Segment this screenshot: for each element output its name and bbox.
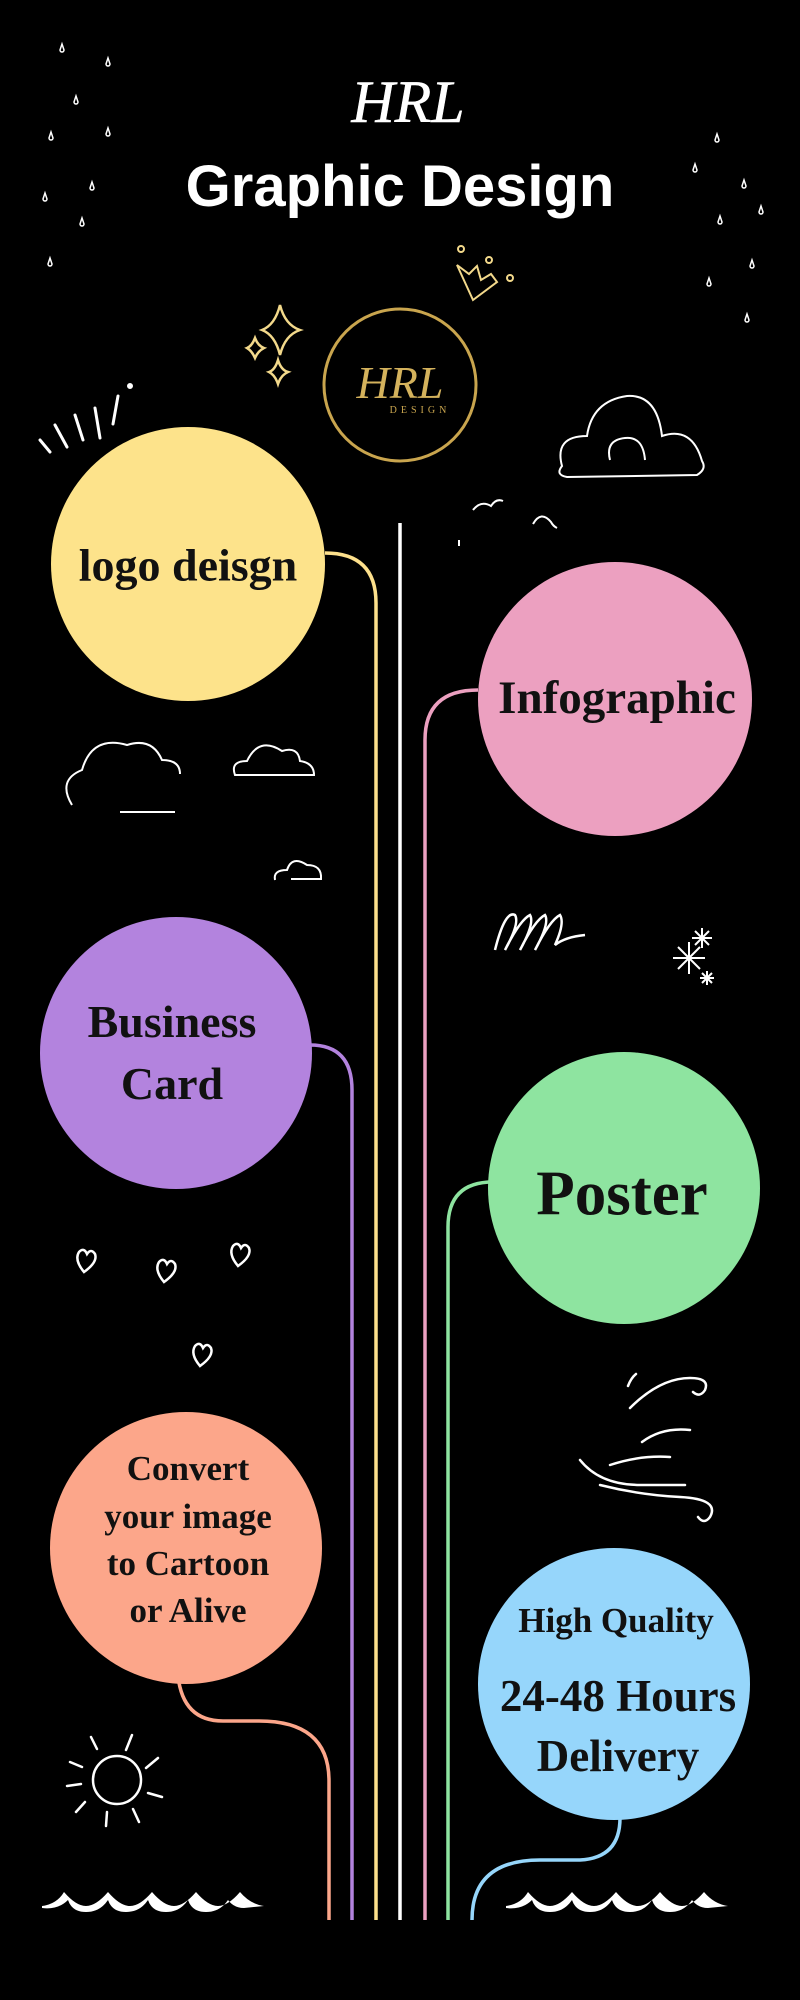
- logo badge: DESIGN: [390, 405, 450, 416]
- signature: HRL: HRL: [350, 69, 465, 135]
- decoration: rain drops: [43, 44, 763, 322]
- circle: delivery: 24-48 Hours: [500, 1671, 736, 1721]
- circle: business card: [40, 917, 312, 1189]
- title: Graphic Design: [186, 154, 614, 219]
- circle: business card: Business: [88, 996, 256, 1047]
- icon: crown: [457, 246, 513, 300]
- logo badge: HRL: [356, 357, 443, 408]
- decoration: waves: [42, 1892, 728, 1912]
- connector lines: [178, 523, 620, 1920]
- icon: cloud: [559, 396, 704, 477]
- circle: convert image: to Cartoon: [107, 1544, 269, 1583]
- icon: stars: [673, 928, 714, 985]
- circle: infographic: [478, 562, 752, 836]
- circle: infographic: Infographic: [498, 672, 736, 724]
- circle: business card: Card: [121, 1058, 224, 1109]
- icon: hearts: [77, 1244, 250, 1366]
- icon: sparkles: [247, 305, 300, 384]
- circle: convert image: your image: [104, 1497, 272, 1536]
- logo badge: [324, 309, 476, 461]
- circle: poster: [488, 1052, 760, 1324]
- circle: delivery: High Quality: [518, 1601, 714, 1640]
- circle: logo design: [51, 427, 325, 701]
- decoration: loops: [495, 914, 585, 950]
- icon: sun: [67, 1735, 162, 1826]
- circle: convert image: or Alive: [130, 1591, 246, 1630]
- decoration: birds: [459, 500, 557, 546]
- circle: delivery: [478, 1548, 750, 1820]
- circle: logo design: logo deisgn: [79, 540, 297, 591]
- decoration: clouds left: [66, 743, 321, 880]
- decoration: rays: [40, 384, 132, 452]
- decoration: wind swirls: [580, 1374, 712, 1521]
- circle: convert image: [50, 1412, 322, 1684]
- circle: convert image: Convert: [127, 1449, 250, 1488]
- circle: delivery: Delivery: [537, 1731, 700, 1781]
- circle: poster: Poster: [536, 1158, 708, 1228]
